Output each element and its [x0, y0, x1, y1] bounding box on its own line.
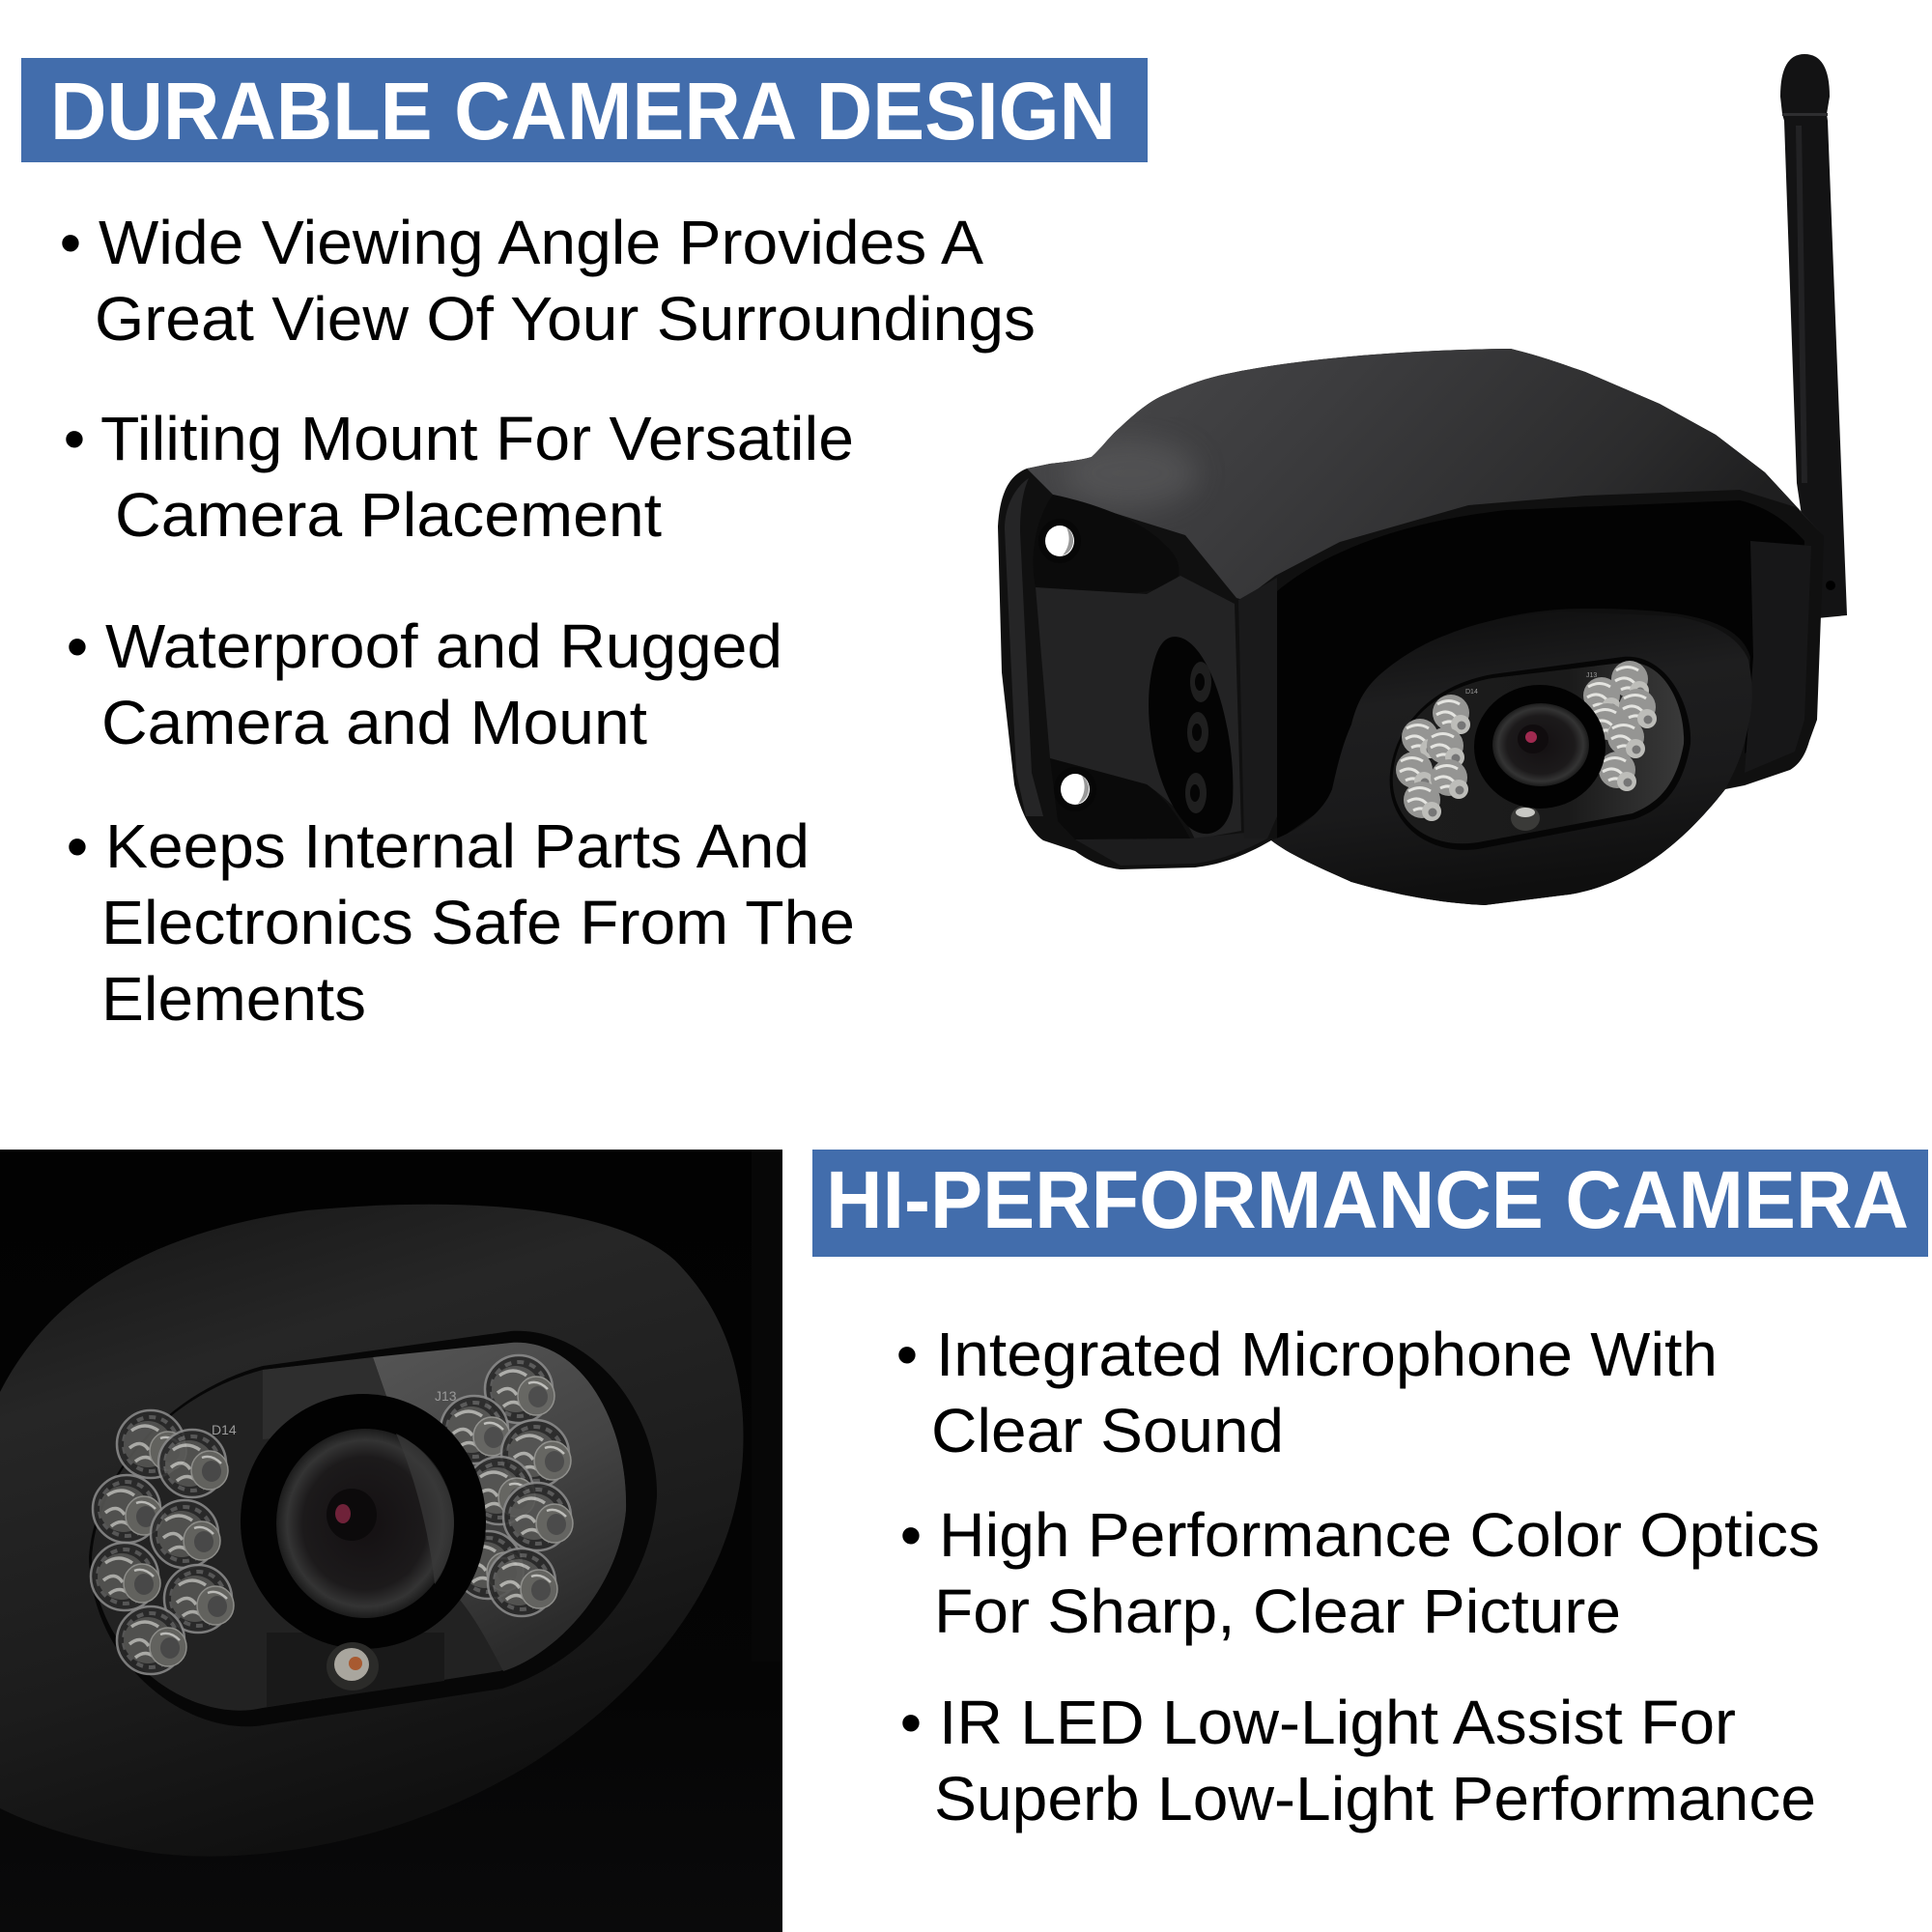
bullet: wide viewing angle: Great View Of Your Surroundings — [95, 284, 1036, 354]
mount hole bottom — [1054, 767, 1096, 811]
bullet: color optics: High Performance Color Optics — [939, 1500, 1820, 1570]
bullet: keeps internal parts: Keeps Internal Parts And — [105, 811, 810, 881]
IR LEDs left — [91, 1410, 234, 1674]
camera front housing — [1271, 611, 1752, 905]
glass glare — [373, 1343, 626, 1671]
bullet: color optics — [900, 1500, 1820, 1646]
bullet: keeps internal parts: Electronics Safe From The — [101, 888, 855, 957]
bolt 3 — [1185, 773, 1207, 813]
bullet: IR LED — [900, 1688, 1816, 1833]
lower mount pocket — [1050, 758, 1190, 839]
bullet: integrated microphone: Integrated Microphone With — [936, 1320, 1718, 1389]
right side wall — [1745, 541, 1811, 773]
bullet: wide viewing angle: Wide Viewing Angle Provides A — [99, 208, 983, 277]
bullet: tilting mount: Tiliting Mount For Versatile — [100, 404, 854, 473]
bolt 2 — [1187, 712, 1208, 753]
upper mount pocket — [1033, 495, 1179, 593]
microphone — [1511, 806, 1540, 831]
IR LEDs right — [440, 1355, 573, 1616]
window — [92, 1343, 626, 1711]
housing blob — [0, 1205, 744, 1857]
hood interior — [1277, 500, 1804, 840]
lens assembly — [241, 1394, 486, 1649]
bolt 1 — [1190, 662, 1211, 702]
bullet: integrated microphone: Clear Sound — [931, 1396, 1284, 1465]
heading: durable camera design: DURABLE CAMERA DESIGN — [50, 66, 1116, 156]
bullet: keeps internal parts: • — [67, 811, 88, 881]
bullet: IR LED: Superb Low-Light Performance — [934, 1764, 1816, 1833]
PCB label D14: D14 — [212, 1422, 237, 1437]
panel: lens close-up photo — [0, 1150, 782, 1932]
microphone — [327, 1642, 379, 1690]
bullet: waterproof: Waterproof and Rugged — [105, 611, 782, 681]
center band — [263, 1357, 397, 1439]
LEDs left cluster — [1396, 695, 1470, 821]
side cable slot — [1149, 637, 1233, 834]
icon: antenna — [1780, 54, 1847, 618]
bullet: waterproof: Camera and Mount — [101, 688, 647, 757]
bullet: wide viewing angle: • — [60, 208, 81, 277]
bullet: tilting mount — [64, 404, 854, 550]
bullet: integrated microphone: • — [896, 1320, 918, 1389]
bullet: integrated microphone — [896, 1320, 1718, 1465]
base rim — [1075, 831, 1267, 866]
bracket rim — [1005, 478, 1043, 816]
heading: hi-performance camera: HI-PERFORMANCE CAMERA — [826, 1154, 1909, 1245]
bullet: wide viewing angle — [60, 208, 1036, 354]
bullet: color optics: For Sharp, Clear Picture — [934, 1577, 1621, 1646]
hood shell — [1027, 349, 1824, 600]
bullet: tilting mount: Camera Placement — [115, 480, 662, 550]
text block: hi-performance bullets — [896, 1320, 1820, 1833]
PCB label J13: J13 — [1586, 672, 1597, 679]
photo: camera with antenna — [998, 54, 1847, 905]
bullet: tilting mount: • — [64, 404, 85, 473]
lower band — [267, 1633, 444, 1707]
camera body — [998, 349, 1824, 905]
panel background — [0, 1150, 782, 1932]
mount hole top — [1038, 519, 1081, 563]
PCB label J13: J13 — [435, 1388, 457, 1404]
bullet: IR LED: • — [900, 1688, 922, 1757]
PCB label D14: D14 — [1465, 689, 1478, 696]
divider strip — [1238, 578, 1277, 838]
bullet: waterproof: • — [67, 611, 88, 681]
bullet: color optics: • — [900, 1500, 922, 1570]
bullet: keeps internal parts — [67, 811, 855, 1034]
bullet: IR LED: IR LED Low-Light Assist For — [939, 1688, 1736, 1757]
window recess — [89, 1331, 657, 1726]
camera window — [1390, 657, 1690, 850]
text block: durable camera bullets — [60, 208, 1036, 1034]
bullet: keeps internal parts: Elements — [101, 964, 366, 1034]
LEDs right cluster — [1583, 661, 1657, 791]
bullet: waterproof — [67, 611, 782, 757]
lens — [1474, 685, 1605, 809]
body silhouette — [998, 349, 1824, 905]
bracket side panel — [1036, 576, 1241, 839]
shell highlight — [1070, 440, 1194, 508]
